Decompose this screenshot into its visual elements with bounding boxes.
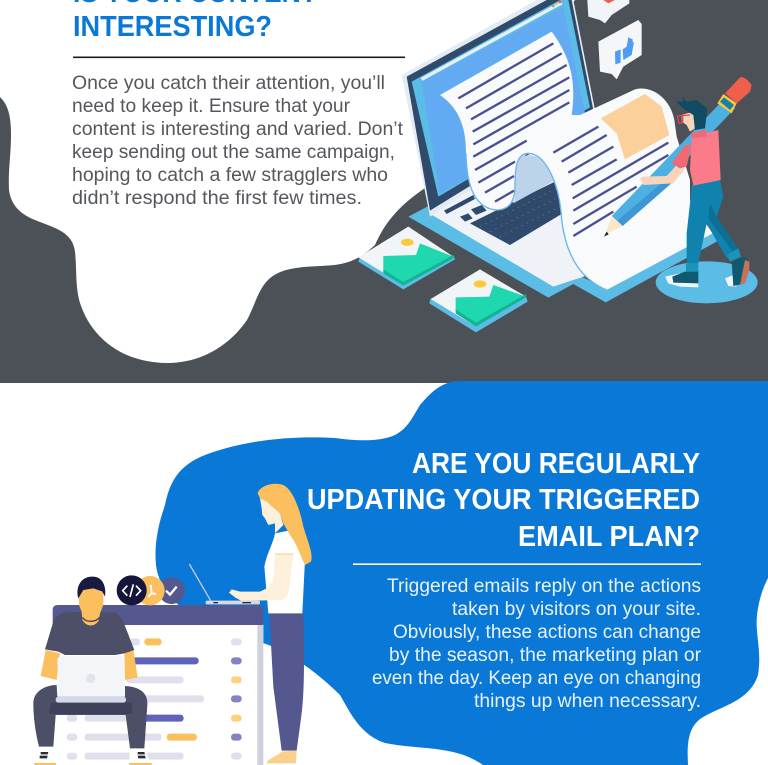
screen browser dots xyxy=(552,1,561,7)
heading: bottom section: ARE YOU REGULARLY xyxy=(412,448,700,480)
bottom rule xyxy=(353,563,701,565)
photo card left xyxy=(358,227,455,289)
laptop base xyxy=(429,140,593,287)
icon: thumbs up bubble xyxy=(598,20,642,79)
paper scroll xyxy=(440,32,713,290)
illustration: laptop, paper and man with pencil xyxy=(358,0,758,332)
photo card right xyxy=(429,269,528,332)
woman laptop xyxy=(189,564,260,604)
heading: bottom section: UPDATING YOUR TRIGGERED xyxy=(307,484,700,516)
woman shirt xyxy=(264,530,305,613)
icon: code circle xyxy=(117,575,147,605)
text block: top body copy: hoping to catch a few stragglers who xyxy=(72,165,388,186)
screen title bar xyxy=(422,3,562,79)
icon: speech bubble top xyxy=(587,0,629,23)
seated man xyxy=(33,577,152,765)
man sleeve xyxy=(672,145,692,168)
text block: top body copy xyxy=(72,73,404,209)
text block: bottom body copy: Obviously, these actions can change xyxy=(393,622,701,643)
text block: top body copy: keep sending out the same campaign, xyxy=(72,142,395,163)
text block: top body copy: content is interesting and varied. Don’t xyxy=(72,119,404,140)
man leg shade xyxy=(49,703,132,714)
text block: top body copy: didn’t respond the first few times. xyxy=(72,188,362,209)
man inner leg shade xyxy=(708,203,740,254)
woman pants xyxy=(269,613,304,751)
man shirt xyxy=(45,612,134,655)
man shirt xyxy=(690,130,721,186)
keyboard xyxy=(444,178,563,245)
woman hair xyxy=(258,484,312,565)
icon: orange circle xyxy=(135,576,165,605)
heading: bottom section xyxy=(307,448,700,553)
floor ellipse under man xyxy=(656,261,758,303)
man laptop xyxy=(56,656,126,703)
top rule xyxy=(73,56,405,58)
heading: bottom section: EMAIL PLAN? xyxy=(518,521,700,553)
text block: bottom body copy: things up when necessary. xyxy=(474,691,701,712)
text lines on lower sheet xyxy=(553,127,668,236)
board right edge xyxy=(257,625,263,765)
man shoes xyxy=(665,257,749,287)
paper curve edge xyxy=(466,153,607,290)
text block: bottom body copy: Triggered emails reply on the actions xyxy=(387,576,701,597)
man group xyxy=(604,77,758,303)
task board body xyxy=(53,623,263,765)
standing woman xyxy=(189,484,312,763)
text block: top body copy: Once you catch their attention, you’ll xyxy=(72,73,385,94)
pencil xyxy=(604,77,752,237)
text block: top body copy: need to keep it. Ensure that your xyxy=(72,96,351,117)
board header xyxy=(53,605,263,625)
icon: check circle xyxy=(158,577,185,604)
man glasses xyxy=(677,115,690,123)
man cuffs xyxy=(686,248,741,272)
text block: bottom body copy xyxy=(372,576,702,712)
text block: bottom body copy: by the season, the marketing plan or xyxy=(389,645,702,666)
laptop base shadow xyxy=(408,200,717,302)
man shoes xyxy=(34,747,152,765)
man arm xyxy=(640,165,685,185)
paper curl shade xyxy=(513,155,558,203)
task rows xyxy=(67,638,242,760)
man legs xyxy=(33,685,147,748)
man legs xyxy=(687,179,740,263)
heading: top section xyxy=(73,0,317,43)
laptop screen bezel xyxy=(402,0,595,217)
panel: blue blob xyxy=(155,381,768,765)
man head xyxy=(682,112,695,132)
laptop screen xyxy=(412,0,590,197)
man hair xyxy=(77,577,105,598)
man arms xyxy=(41,650,138,680)
panel: dark top background xyxy=(0,0,768,383)
text lines on upper sheet xyxy=(458,43,569,202)
orange image block on sheet xyxy=(601,94,669,159)
woman sleeve line xyxy=(275,553,293,555)
laptop screen frame xyxy=(407,0,593,211)
man collar xyxy=(691,129,707,138)
man collar xyxy=(82,617,100,621)
woman arm xyxy=(229,554,293,601)
man hair xyxy=(676,97,707,130)
man face and neck xyxy=(79,588,103,625)
woman face xyxy=(260,498,283,533)
illustration: team with task board xyxy=(33,484,312,765)
woman foot xyxy=(267,751,297,763)
woman upper body xyxy=(229,484,312,613)
white blob behind top text xyxy=(0,0,575,363)
heading: top section: INTERESTING? xyxy=(73,11,272,43)
text block: bottom body copy: taken by visitors on your site. xyxy=(452,599,701,620)
text block: bottom body copy: even the day. Keep an eye on changing xyxy=(372,668,701,689)
